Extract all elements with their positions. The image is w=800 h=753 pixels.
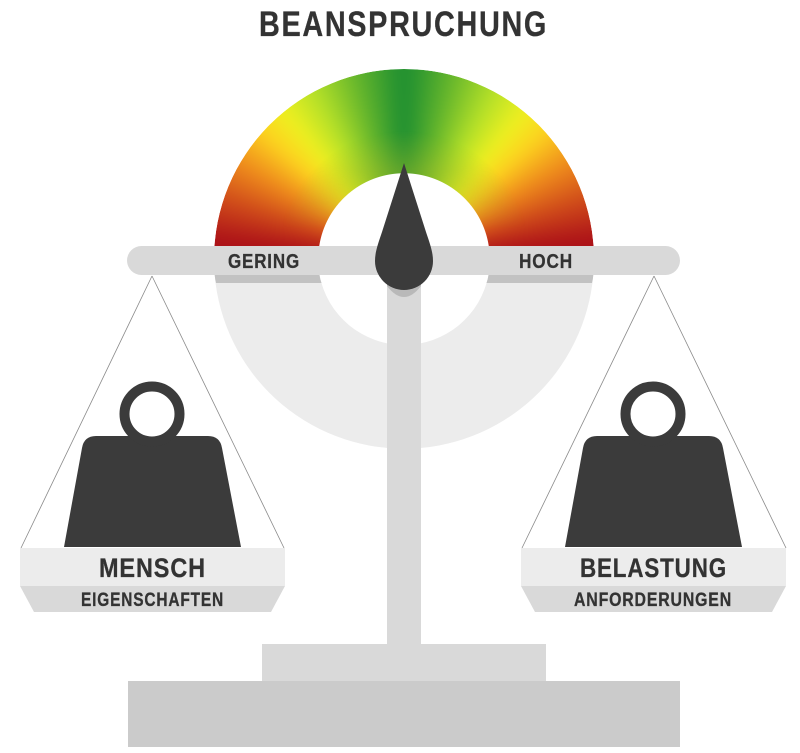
scale beam bbox=[127, 246, 680, 275]
label: mensch: MENSCH bbox=[99, 553, 206, 583]
left weight bbox=[64, 386, 241, 547]
right weight bbox=[565, 386, 742, 547]
left pan bottom bbox=[20, 586, 285, 612]
right pan bottom bbox=[521, 586, 786, 612]
left pan strings bbox=[21, 276, 284, 548]
scale base lower block bbox=[128, 681, 680, 747]
label: eigenschaften: EIGENSCHAFTEN bbox=[81, 590, 224, 611]
right pan top bbox=[521, 548, 786, 586]
right pan group bbox=[521, 276, 786, 612]
right beam shadow bbox=[486, 275, 593, 283]
needle shadow bbox=[387, 275, 421, 297]
label: anforderungen: ANFORDERUNGEN bbox=[574, 590, 732, 611]
title: BEANSPRUCHUNG bbox=[259, 5, 548, 44]
scale pillar bbox=[387, 275, 421, 644]
scale base upper block bbox=[262, 644, 546, 681]
label: belastung: BELASTUNG bbox=[580, 553, 727, 583]
gauge needle bbox=[375, 163, 433, 290]
label: gering: GERING bbox=[228, 250, 300, 273]
left pan top bbox=[20, 548, 285, 586]
label: hoch: HOCH bbox=[519, 250, 573, 273]
left beam shadow bbox=[215, 275, 322, 283]
colour gauge arc bbox=[214, 69, 594, 246]
left pan group bbox=[20, 276, 285, 612]
right pan strings bbox=[522, 276, 786, 548]
